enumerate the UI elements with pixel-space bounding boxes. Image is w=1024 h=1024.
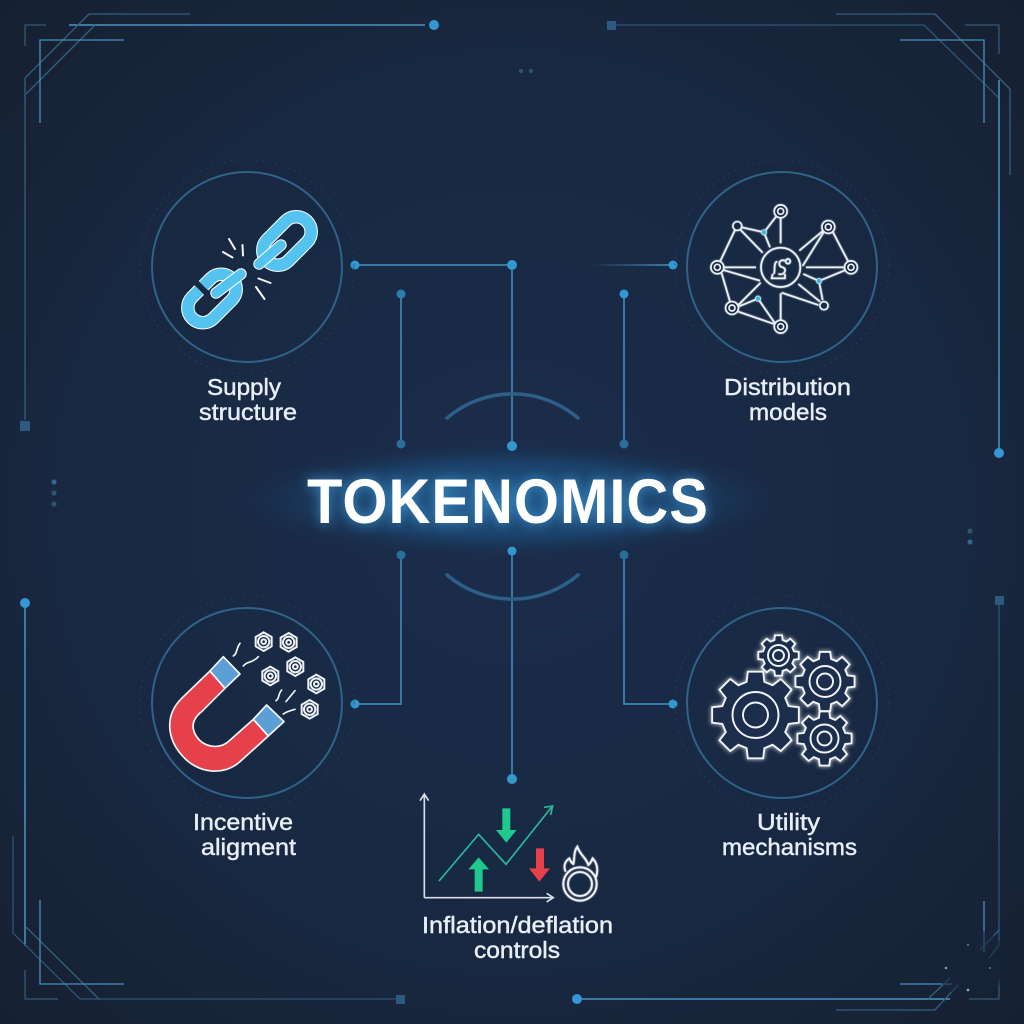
circle ring <box>675 160 889 374</box>
label: Supply <box>207 374 282 400</box>
frame: top-left corner lines <box>20 14 439 431</box>
label <box>199 374 297 425</box>
label: Incentive <box>193 809 293 835</box>
icon: chart with arrows and burning token <box>420 794 597 902</box>
decorative dots <box>51 69 973 545</box>
title glow <box>240 442 780 558</box>
panel: utility mechanisms <box>675 596 889 860</box>
frame: top-right corner lines <box>607 14 1010 458</box>
label <box>193 809 297 860</box>
circle ring <box>140 596 354 810</box>
circle ring <box>140 160 354 374</box>
panel: inflation and deflation controls <box>420 794 613 963</box>
connectors: network lines and nodes <box>350 260 678 784</box>
circle ring <box>675 596 889 810</box>
panel: distribution models <box>675 160 889 425</box>
label: structure <box>199 399 297 425</box>
label <box>422 912 613 963</box>
icon: gears <box>712 635 855 766</box>
label: aligment <box>201 834 297 860</box>
panel: incentive alignment <box>140 596 354 860</box>
label: controls <box>474 937 560 963</box>
icon: broken chain <box>182 211 317 329</box>
frame: bottom-left corner lines <box>13 598 405 1004</box>
label: mechanisms <box>722 834 857 860</box>
label: models <box>749 399 827 425</box>
panel: supply structure <box>140 160 354 425</box>
label: Utility <box>757 809 821 835</box>
icon: network <box>711 205 857 333</box>
label <box>724 374 851 425</box>
title: TOKENOMICS <box>307 466 708 536</box>
label: Distribution <box>724 374 851 400</box>
label: Inflation/deflation <box>422 912 613 938</box>
central arcs <box>447 394 578 599</box>
title: TOKENOMICS <box>307 466 708 536</box>
icon: magnet with nuts <box>170 632 324 771</box>
label <box>722 809 857 860</box>
frame: bottom-right corner lines <box>572 596 1006 1010</box>
